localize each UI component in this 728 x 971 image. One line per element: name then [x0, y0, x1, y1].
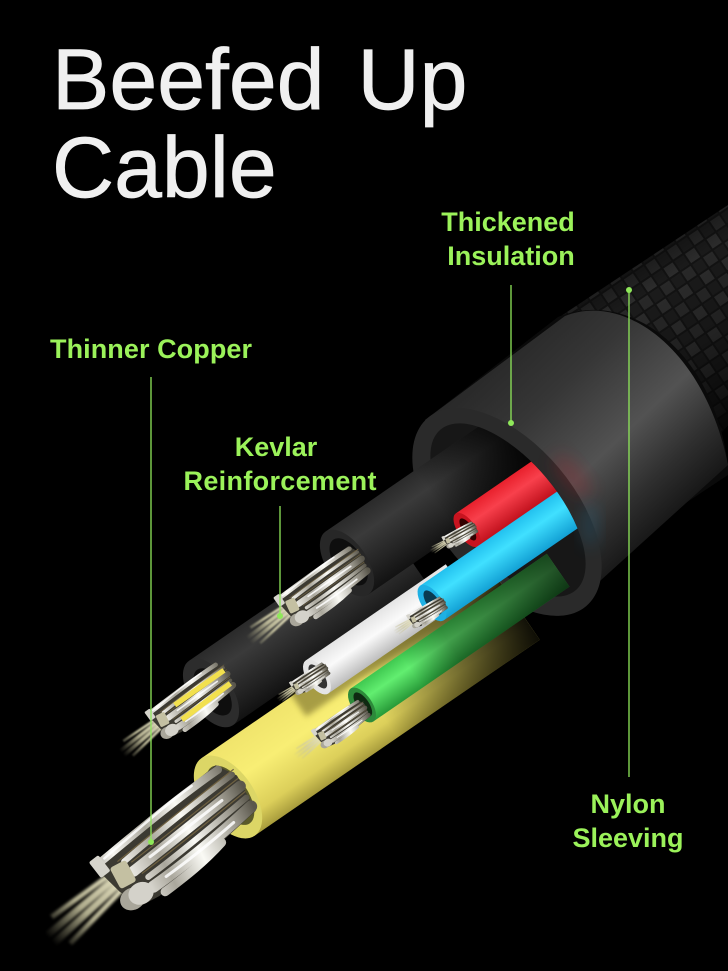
label: thinner copper: Thinner Copper	[50, 334, 252, 364]
label: nylon sleeving: Nylon	[590, 789, 666, 819]
copper strands: lower black cable	[104, 659, 243, 760]
copper strands: red wire	[426, 521, 480, 554]
nylon braided sleeve	[552, 205, 728, 470]
label: kevlar reinforcement: Reinforcement	[184, 466, 376, 496]
lower black cable	[183, 564, 424, 728]
title: Beefed Up	[52, 32, 467, 128]
label: kevlar reinforcement	[184, 432, 376, 496]
blue wire	[418, 492, 578, 622]
copper strands: white wire	[271, 661, 333, 703]
copper strands: upper black cable	[230, 543, 377, 648]
copper strands: yellow cable	[14, 759, 270, 952]
green wire	[342, 554, 569, 727]
inner cable bundle	[183, 427, 578, 838]
label: thickened insulation	[441, 207, 575, 271]
label: thickened insulation: Insulation	[447, 241, 575, 271]
white wire	[303, 564, 448, 694]
label: kevlar reinforcement: Kevlar	[235, 432, 318, 462]
title	[52, 32, 467, 216]
leader line: thinner copper	[148, 377, 154, 845]
copper strands: blue wire	[388, 595, 450, 636]
copper strands: green wire	[284, 698, 374, 761]
leader line: thickened insulation	[508, 285, 514, 426]
title: Cable	[52, 120, 277, 216]
upper black cable	[320, 427, 543, 594]
leader line: kevlar reinforcement	[277, 506, 283, 619]
label: nylon sleeving: Sleeving	[572, 823, 684, 853]
thickened insulation jacket	[376, 310, 728, 650]
yellow cable	[194, 582, 540, 838]
label: nylon sleeving	[572, 789, 684, 853]
red wire	[454, 462, 558, 548]
label: thickened insulation: Thickened	[441, 207, 575, 237]
leader line: nylon sleeving	[626, 287, 632, 777]
